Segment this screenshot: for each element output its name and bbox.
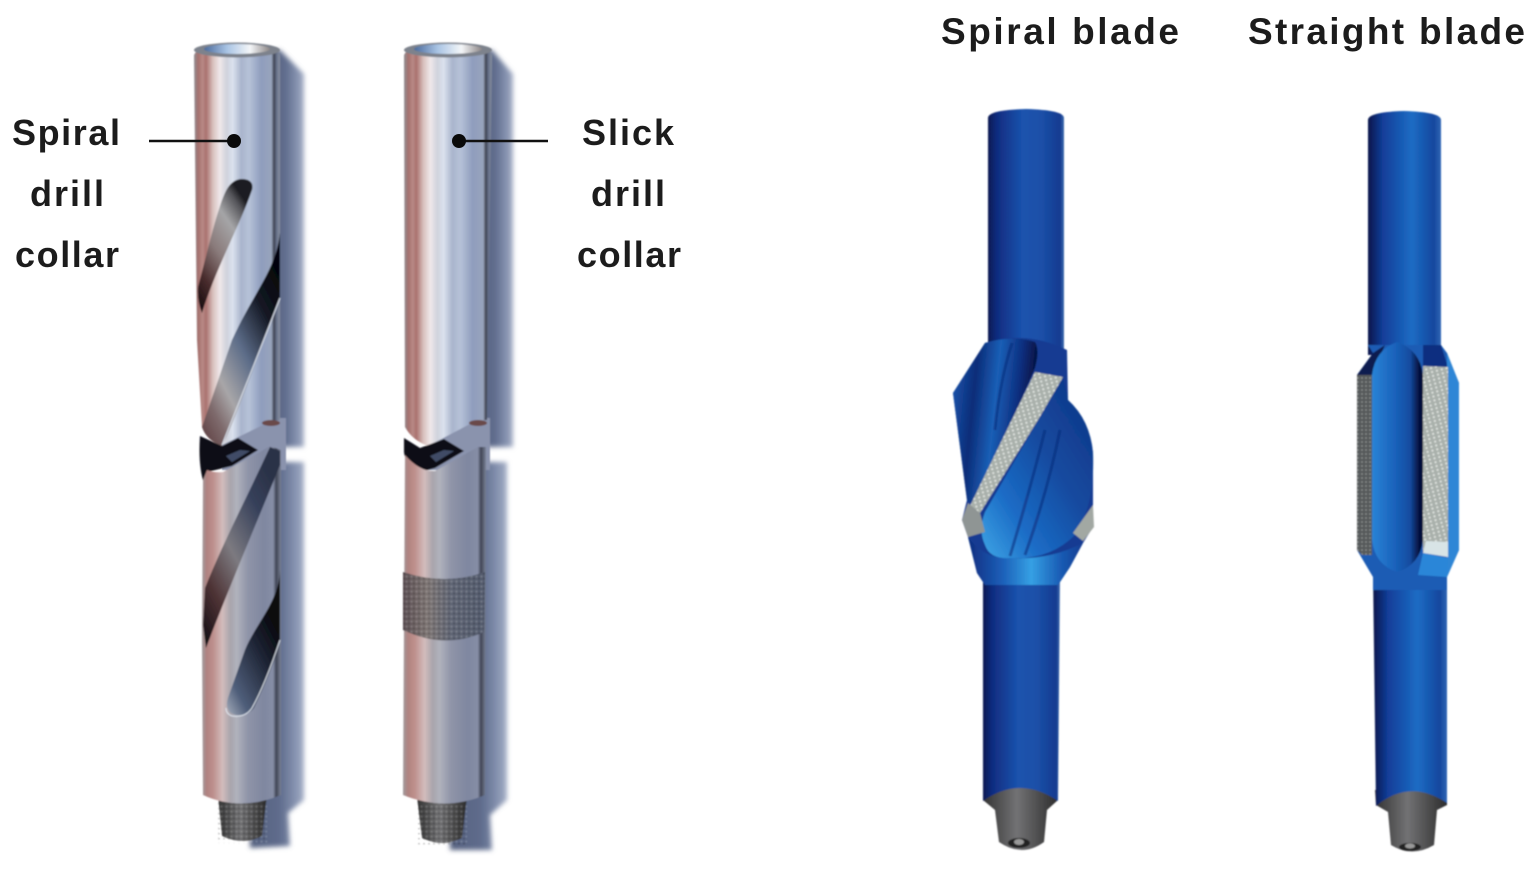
blade body [1357, 345, 1459, 590]
callout: slick drill collar: drill [591, 173, 665, 214]
callout: spiral drill collar [12, 112, 241, 275]
gap behind break [222, 418, 286, 470]
right hard-faced blade [1423, 366, 1448, 557]
threaded pin of spiral collar [218, 795, 267, 843]
callout: slick drill collar: collar [577, 234, 681, 275]
right bevel [1447, 353, 1459, 577]
upper shadow of spiral collar [262, 50, 304, 447]
groove edge highlight [226, 640, 280, 716]
lower shaft [1373, 570, 1447, 806]
stabilizer: straight blade [1357, 111, 1459, 852]
lower shadow of slick collar [450, 462, 507, 850]
lower section of slick collar [403, 447, 486, 804]
break highlight [430, 450, 454, 462]
pin end [983, 785, 1058, 850]
pin end [1375, 790, 1447, 852]
collar cut end [469, 420, 487, 426]
collar: spiral drill collar [194, 42, 304, 848]
hard-faced spiral surface [968, 372, 1063, 513]
top bore of slick collar [404, 42, 492, 58]
groove highlight [222, 298, 280, 445]
upper shoulder shadow [1357, 345, 1385, 375]
central flute [1372, 342, 1423, 572]
lower right highlight [1418, 553, 1448, 577]
upper spiral groove one [198, 179, 252, 313]
hardband [403, 572, 485, 641]
threaded pin of slick collar [417, 797, 467, 845]
lower shadow of spiral collar [250, 462, 304, 848]
upper section of spiral collar [194, 46, 280, 446]
lower spiral groove one [203, 447, 280, 648]
callout: slick drill collar: Slick [582, 112, 675, 153]
heading: straight blade: Straight blade [1248, 11, 1525, 52]
callout: slick drill collar [452, 112, 681, 275]
lower shaft [983, 575, 1060, 801]
blade body outline [953, 338, 1093, 585]
broken section shadow [404, 438, 464, 472]
upper right shoulder [1423, 345, 1448, 367]
flute lines [995, 343, 1060, 556]
upper shadow of slick collar [472, 50, 513, 447]
upper shaft [988, 109, 1064, 350]
lower left carbide pad [962, 503, 985, 537]
right blade bright end [1423, 541, 1448, 557]
upper section of slick collar [404, 46, 492, 446]
callout: spiral drill collar: collar [15, 234, 119, 275]
lower right carbide pad [1073, 505, 1094, 541]
lower spiral groove two [227, 570, 280, 715]
left hard-faced blade [1357, 375, 1372, 555]
upper spiral groove two [202, 233, 280, 446]
collar: slick drill collar [403, 42, 513, 850]
left blade flute [953, 339, 1038, 505]
collar cut end [262, 420, 280, 426]
lower section of spiral collar [202, 446, 281, 804]
upper shaft [1368, 111, 1441, 355]
top bore of spiral collar [194, 42, 280, 58]
right blade flute [982, 378, 1093, 558]
gap behind break [428, 418, 490, 470]
callout: spiral drill collar: drill [30, 173, 104, 214]
callout: spiral drill collar: Spiral [12, 112, 120, 153]
break highlight [226, 450, 250, 462]
heading: spiral blade: Spiral blade [941, 11, 1179, 52]
stabilizer: spiral blade [953, 109, 1094, 850]
broken section shadow [200, 436, 258, 484]
lower shoulder band [968, 537, 1083, 585]
